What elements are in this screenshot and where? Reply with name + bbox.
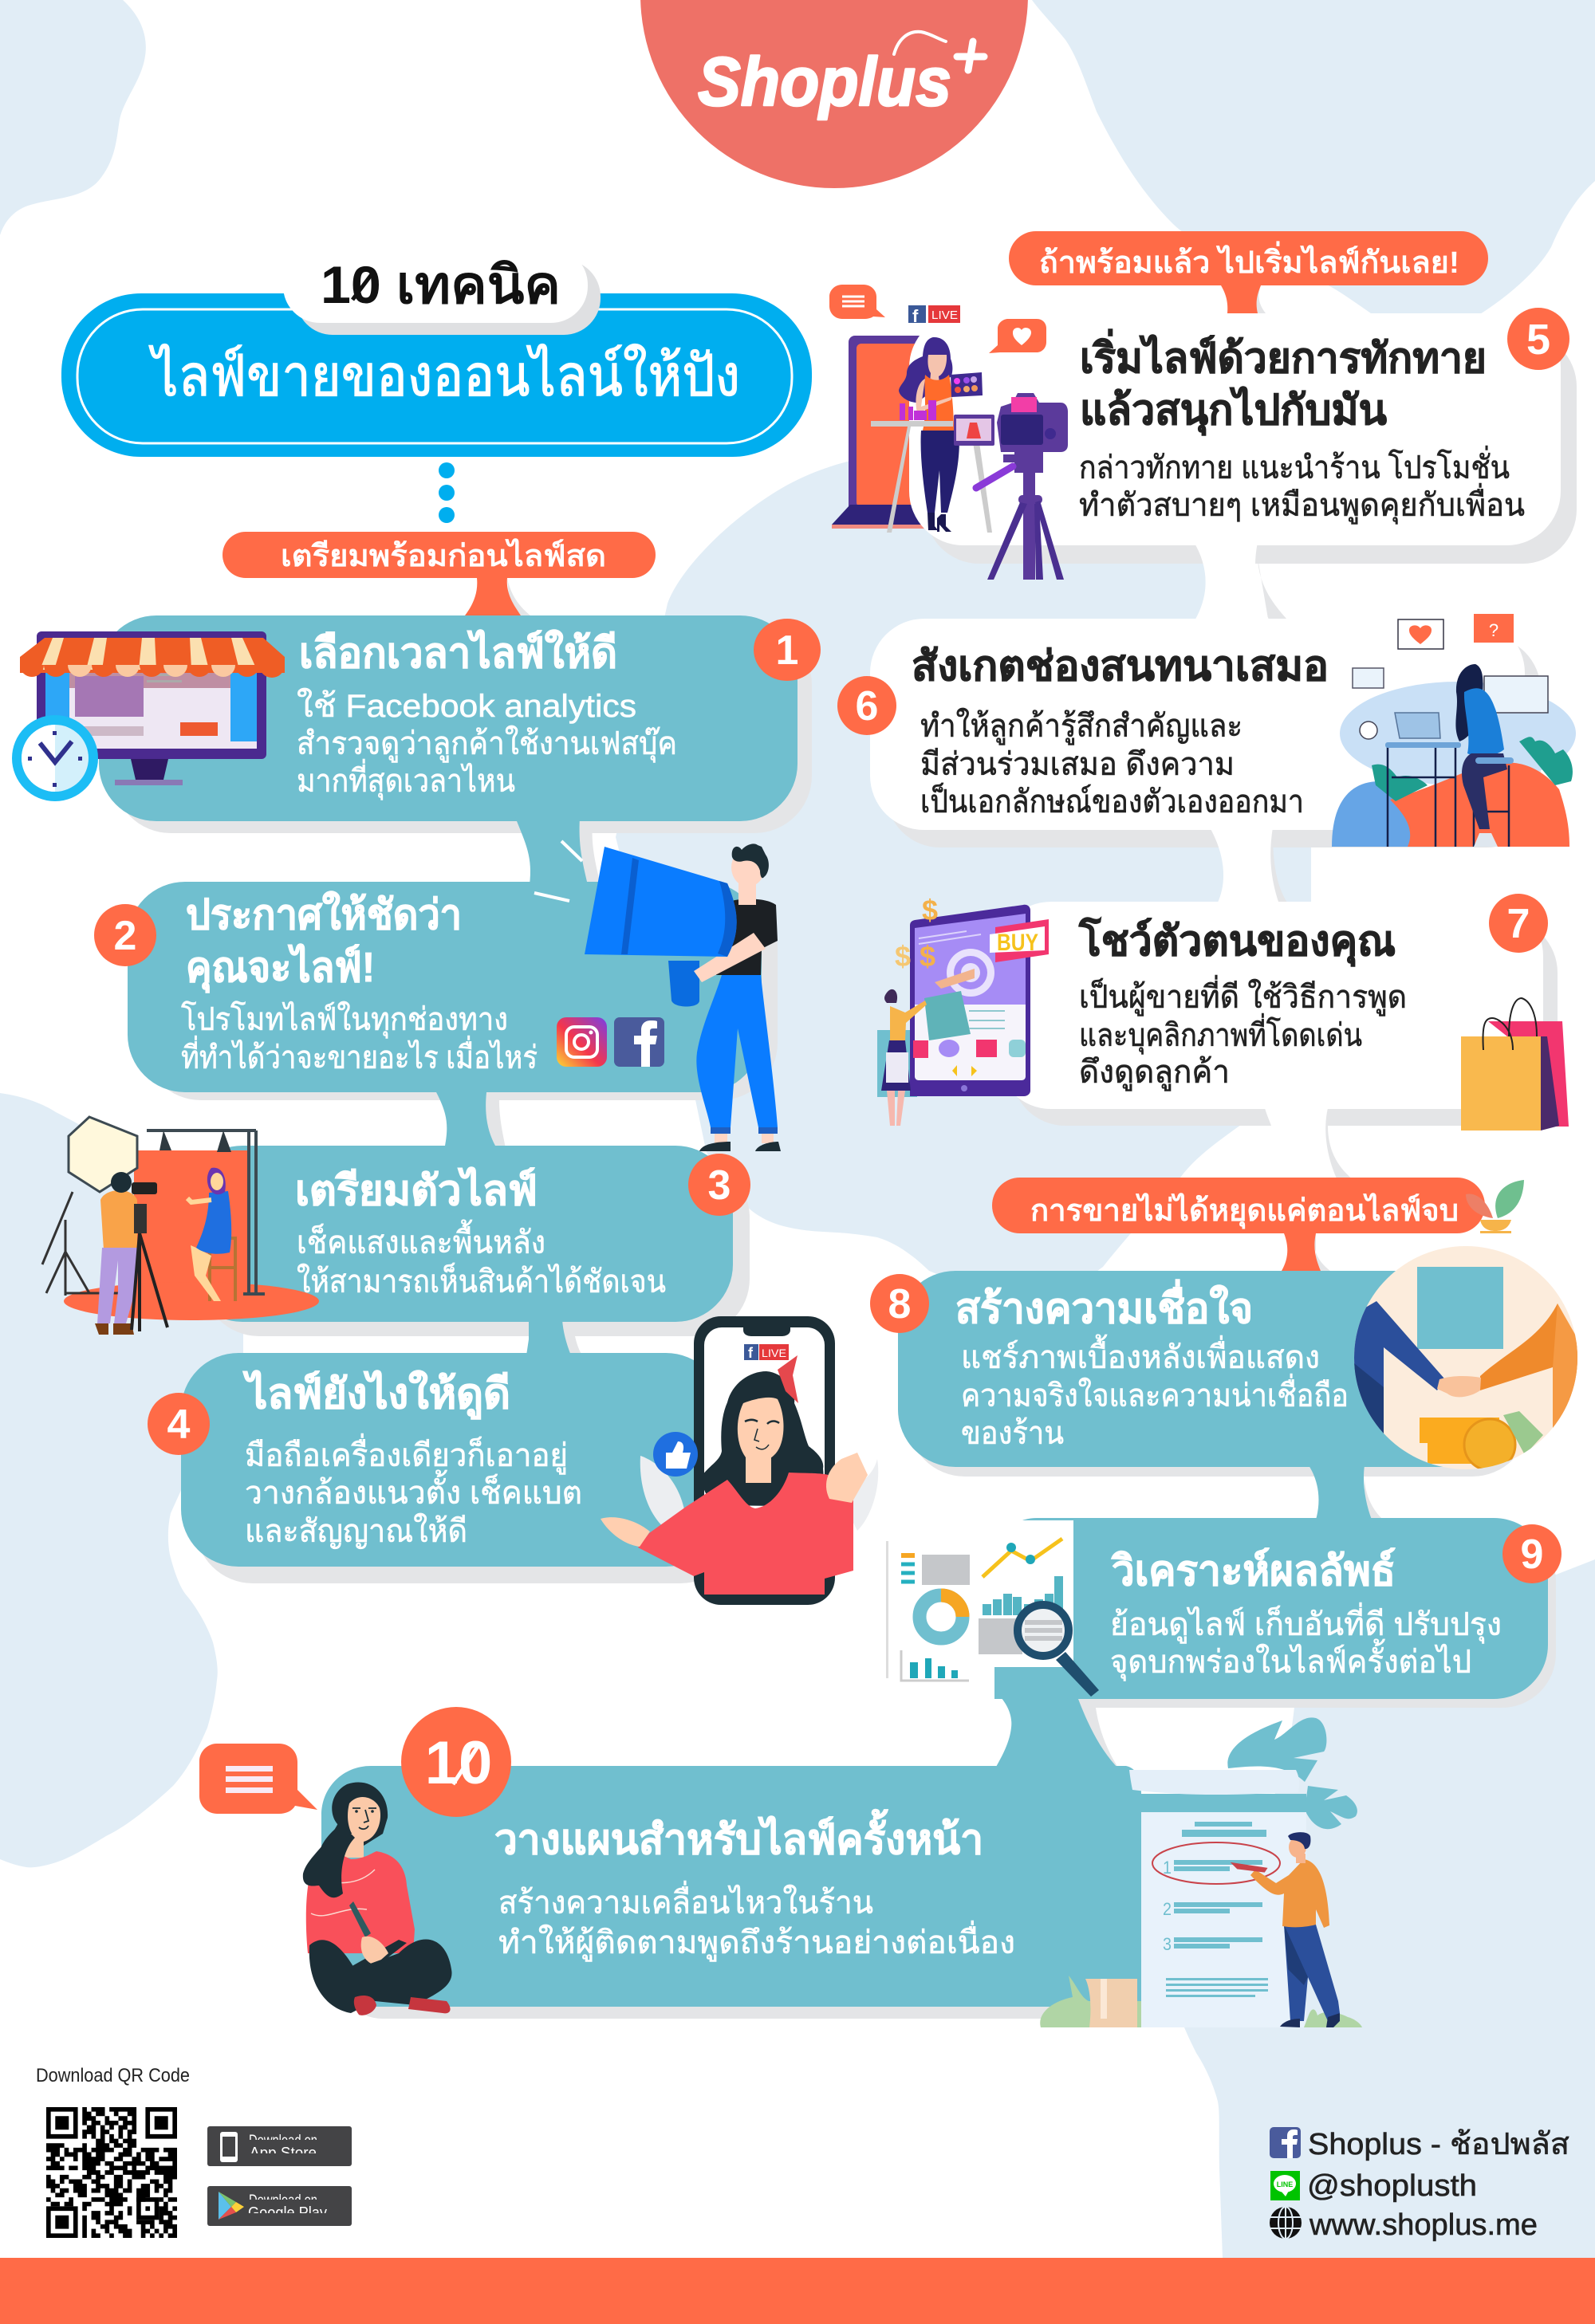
illustration: plant behind document [1040,1976,1141,2027]
QR label: Download QR Code [36,2065,190,2086]
illustration: woman at laptop: ? [1489,620,1499,640]
body 2: ที่ทำได้ว่าจะขายอะไร เมื่อไหร่ [181,1036,538,1075]
photographer [95,1172,167,1335]
illustration: plant in pot [1466,1180,1524,1233]
illustration: document list: 1 [1163,1858,1172,1878]
woman sweater [638,1473,853,1595]
illustration: handshake circle [1348,1246,1587,1470]
presenter [899,337,959,532]
body 6: มีส่วนร่วมเสมอ ดึงความ [920,747,1235,782]
badge 2 [94,904,156,966]
body 7: เป็นผู้ขายที่ดี ใช้วิธีการพูด [1079,975,1407,1016]
badge 8: 8 [888,1281,911,1327]
badge 3: 3 [708,1162,731,1209]
body 1: ใช้ Facebook analytics [297,687,636,724]
heading 5: แล้วสนุกไปกับมัน [1080,386,1387,436]
website link: www.shoplus.me [1309,2208,1538,2242]
body 8: แชร์ภาพเบื้องหลังเพื่อแสดง [961,1334,1320,1375]
button: app store: App Store [250,2145,317,2162]
panel: step 3 [185,1092,750,1336]
body 9 [1110,1602,1502,1681]
illustration: document list [1129,1770,1306,2027]
icon: heart box [1398,619,1443,649]
camera [997,393,1068,473]
icon: heart bubble [989,319,1046,353]
heading 2: คุณจะไลฟ์! [186,943,375,993]
button: google play: Download on [249,2192,317,2209]
illustration: chat bubble and Facebook Live tag: f [912,306,919,326]
badge 10 [401,1707,511,1817]
body 1: สำรวจดูว่าลูกค้าใช้งานเฟสบุ๊ค [297,725,677,763]
panel: step 10 [321,1690,1306,2019]
heading 9: วิเคราะห์ผลลัพธ์ [1111,1547,1396,1595]
panel: step 7 [997,828,1558,1126]
body 3: ให้สามารถเห็นสินค้าได้ชัดเจน [297,1262,666,1300]
panel: step 8 [870,1271,1530,1477]
button: app store [207,2126,352,2166]
body 6: เป็นเอกลักษณ์ของตัวเองออกมา [920,782,1304,820]
heading 4: ไลฟ์ยังไงให้ดูดี [242,1370,510,1420]
body 2: โปรโมทไลฟ์ในทุกช่องทาง [181,1001,508,1039]
panel: step 5 [909,308,1577,564]
woman hair [702,1371,824,1508]
body 9: จุดบกพร่องในไลฟ์ครั้งต่อไป [1110,1638,1471,1681]
woman face [738,1398,783,1462]
backdrop banner behind step 5 [832,336,941,529]
body 6 [920,707,1304,820]
body 10 [498,1881,1015,1961]
heading 8: สร้างความเชื่อใจ [955,1280,1253,1332]
illustration: tablet shopping: $ [895,940,911,973]
body 7: และบุคลิกภาพที่โดดเด่น [1079,1013,1362,1055]
illustration: document list: 2 [1163,1899,1172,1919]
body 8: ความจริงใจและความน่าเชื่อถือ [961,1374,1349,1414]
body 7 [1079,975,1407,1091]
model [187,1168,235,1301]
icon: facebook [614,1017,664,1067]
panel: step 4 [148,1319,738,1583]
illustration: girl writing [303,1783,452,2015]
icon: thumbs up [653,1432,698,1477]
badge 9: 9 [1521,1532,1543,1578]
illustration: phone with woman: f [748,1345,754,1361]
footer bar [0,2258,1595,2324]
heading 3: เตรียมตัวไลฟ์ [295,1166,538,1214]
illustration: chat bubble [199,1744,317,1814]
body 4: และสัญญาณให้ดี [245,1512,467,1549]
button: google play: Google Play [248,2204,327,2222]
footer: social links [1270,2127,1569,2242]
body 3 [297,1219,666,1300]
badge 9 [1502,1524,1562,1583]
badge 10: 10 [425,1729,492,1797]
badge 7 [1489,894,1548,953]
body 9: ย้อนดูไลฟ์ เก็บอันที่ดี ปรับปรุง [1110,1602,1502,1644]
illustration: document list: 3 [1163,1934,1172,1954]
badge 8 [870,1274,929,1333]
illustration: chat bubble and Facebook Live tag [829,285,960,326]
body 10: ทำให้ผู้ติดตามพูดถึงร้านอย่างต่อเนื่อง [498,1921,1015,1961]
body 4: วางกล้องแนวตั้ง เช็คแบต [245,1469,582,1511]
icon: instagram [557,1017,607,1067]
illustration: online shop monitor with clock [12,631,285,801]
badge 6: 6 [856,683,878,729]
title line 1: 10 เทคนิค [321,255,561,314]
heading 5: เริ่มไลฟ์ด้วยการทักทาย [1080,329,1487,382]
heading 5 [1080,329,1487,436]
logo badge [640,0,1028,188]
facebook link: Shoplus - ช้อปพลัส [1308,2128,1569,2161]
illustration: tropical leaves [1227,1717,1357,1829]
body 1: มากที่สุดเวลาไหน [297,759,515,800]
illustration: man with pencil [1234,1832,1362,2027]
illustration: chat bubble and Facebook Live tag: LIVE [931,309,958,322]
body 5 [1079,446,1525,525]
body 5: กล่าวทักทาย แนะนำร้าน โปรโมชั่น [1079,446,1510,486]
title banner [61,248,812,457]
heading 7: โชว์ตัวตนของคุณ [1078,916,1396,967]
dots connector [439,462,455,523]
illustration: woman at laptop [1332,614,1576,847]
shopper [881,989,927,1126]
illustration: photo studio [42,1117,319,1335]
line link: LINE [1277,2180,1293,2188]
QR code [46,2107,177,2238]
section pill: start live: ถ้าพร้อมแล้ว ไปเริ่มไลฟ์กันเลย! [1039,241,1459,280]
body 6: ทำให้ลูกค้ารู้สึกสำคัญและ [920,707,1243,745]
section pill: start live [1009,231,1488,313]
line link: @shoplusth [1307,2169,1477,2203]
heading 6: สังเกตช่องสนทนาเสมอ [912,643,1329,690]
makeup palette [951,372,983,397]
button: app store: Download on [249,2133,317,2149]
badge 7: 7 [1507,901,1530,947]
illustration: shopping bags [1461,998,1569,1131]
badge 4 [148,1393,210,1455]
body 1 [297,687,677,800]
heading 2: ประกาศให้ชัดว่า [186,891,462,938]
badge 1: 1 [776,627,798,674]
BUY tag [990,919,1049,962]
body 8: ของร้าน [961,1416,1064,1451]
illustration: phone with woman: LIVE [762,1347,786,1359]
body 7: ดึงดูดลูกค้า [1079,1055,1230,1091]
button: google play [207,2186,352,2226]
illustration: phone with woman [601,1316,878,1605]
panel: step 1 [99,615,821,833]
badge 5: 5 [1526,316,1550,364]
title line 2: ไลฟ์ขายของออนไลน์ให้ปัง [149,344,740,408]
body 4 [245,1433,582,1549]
body 5: ทำตัวสบายๆ เหมือนพูดคุยกับเพื่อน [1079,483,1525,525]
panel: step 6 [837,542,1541,847]
footer: QR block [36,2065,352,2238]
badge 5 [1507,308,1569,370]
logo wordmark: Shoplus [698,44,951,120]
heading 1: เลือกเวลาไลฟ์ให้ดี [299,629,617,677]
illustration: man with megaphone [534,841,781,1151]
section pill: prepare: เตรียมพร้อมก่อนไลฟ์สด [281,538,606,573]
icon: clock [12,715,98,801]
badge 1 [754,619,821,681]
heading 2 [186,891,462,993]
body 8 [961,1334,1349,1451]
section pill: after live: การขายไม่ได้หยุดแค่ตอนไลฟ์จบ [1030,1193,1459,1229]
illustration: woman presenter with camera [871,319,1068,580]
section pill: after live [992,1178,1485,1271]
panel: step 9 [994,1465,1562,1708]
badge 4: 4 [167,1402,191,1448]
body 3: เช็คแสงและพื้นหลัง [297,1219,545,1260]
body 10: สร้างความเคลื่อนไหวในร้าน [498,1881,873,1921]
panel: step 2 [94,817,778,1100]
body 2 [181,1001,538,1075]
heading 10: วางแผนสำหรับไลฟ์ครั้งหน้า [494,1809,983,1863]
illustration: tablet shopping: $ [920,940,935,973]
illustration: report documents with magnifier [886,1520,1099,1697]
illustration: tablet shopping [877,894,1049,1126]
connector into pill [1264,1108,1353,1180]
section pill: prepare [223,532,656,615]
badge 3 [688,1154,750,1216]
body 4: มือถือเครื่องเดียวก็เอาอยู่ [245,1433,568,1474]
badge 2: 2 [114,913,136,959]
badge 6 [837,676,896,735]
BUY tag: BUY [997,930,1038,956]
illustration: tablet shopping: $ [922,894,938,926]
